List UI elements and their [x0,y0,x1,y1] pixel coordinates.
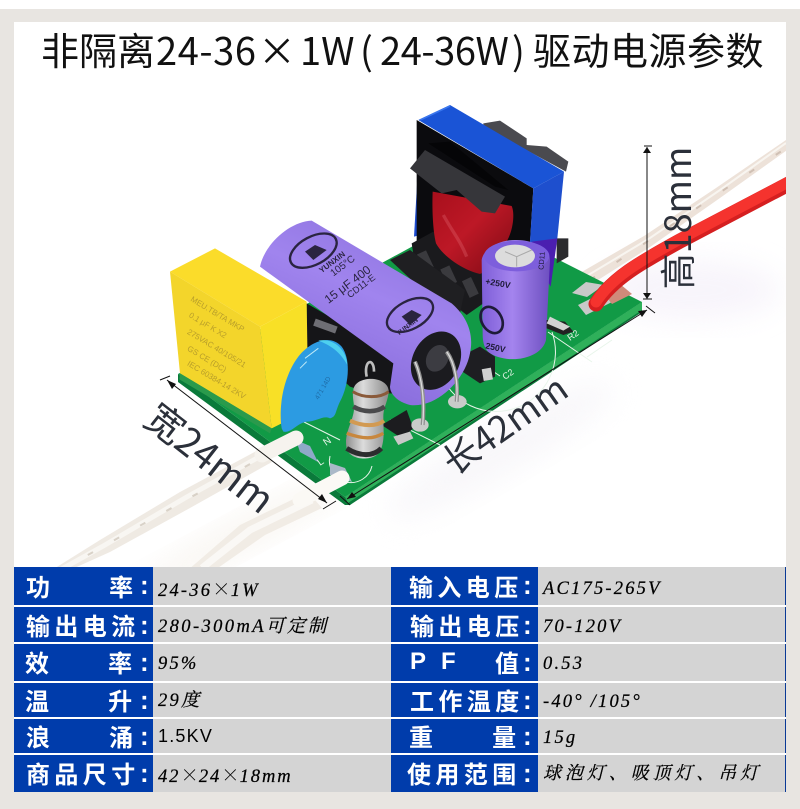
title: 驱动电源参数 [533,21,764,76]
row: power and input voltage: 输入电压 [409,568,523,603]
row: surge and weight: 1.5KV [158,726,213,746]
small electrolytic capacitor: CD11 [536,251,547,270]
row: power and input voltage: 24-36×1W [158,576,260,602]
row: surge and weight: 浪 涌 [26,718,137,753]
row: product size and application range: 球泡灯、吸顶灯、吊灯 [543,763,762,783]
row: output current and output voltage: : [523,610,532,640]
circuit board [178,246,642,505]
row: product size and application range: : [523,758,532,788]
row: product size and application range: 42×24×18mm [158,762,292,788]
red wire [596,176,800,304]
row: efficiency and power factor: : [523,647,532,677]
front white wires [52,448,322,570]
dimension line: width [160,376,336,509]
large electrolytic capacitor: 15 μF 400 [322,262,374,306]
yellow X2 capacitor: GS CE (DC) [186,344,228,375]
specification table [14,567,786,792]
row: temperature rise and working temperature: : [140,685,149,715]
row: output current and output voltage: : [140,610,149,640]
product photo illustration [57,105,786,567]
blue disc varistor: 471 14D [314,376,333,401]
row: output current and output voltage: 280-300mA可定制 [158,617,329,637]
row: power and input voltage: 功 率 [26,568,137,603]
striped power resistor [346,362,389,459]
row: power and input voltage: : [140,570,149,600]
yellow X2 capacitor: 275VAC 40/105/21 [186,327,248,370]
transformer [410,105,568,315]
title: 24-36 [156,21,257,76]
row: product size and application range [14,755,786,792]
large electrolytic capacitor: YUNXIN [395,317,420,338]
row: product size and application range: 使用范围 [407,755,521,790]
row: efficiency and power factor: 95% [158,654,199,674]
label: width 24mm: 宽24mm [135,388,288,524]
blue disc varistor [281,340,348,432]
row: surge and weight [14,718,786,753]
label: length 42mm: 长42mm [431,361,577,486]
row: product size and application range: 商品尺寸 [26,755,140,790]
row: temperature rise and working temperature: 温 升 [25,682,136,717]
row: temperature rise and working temperature: -40° /105° [543,692,642,712]
row: surge and weight: 重 量 [409,718,520,753]
large electrolytic capacitor: 105°C [329,254,357,279]
row: temperature rise and working temperature [14,682,786,717]
title: × [258,21,296,76]
dimension line: height [643,146,652,299]
row: efficiency and power factor: 效 率 [25,644,136,679]
row: power and input voltage: : [523,570,532,600]
row: output current and output voltage: 70-120V [543,617,622,637]
title: 1W [300,21,354,76]
white photo panel [14,22,786,567]
large electrolytic capacitor: CD11-E [345,272,377,300]
row: temperature rise and working temperature: 29度 [158,691,202,711]
row: output current and output voltage: 输出电压 [410,607,524,642]
large electrolytic capacitor [260,221,471,405]
row: surge and weight: 15g [543,728,577,748]
capacitor pins and black parts [382,352,467,445]
row: surge and weight: : [523,721,532,751]
row: efficiency and power factor: P F [410,648,460,675]
circuit board: L [315,456,327,468]
row: power and input voltage [14,567,786,605]
circuit board: R2 [565,328,581,343]
title: 非隔离 [41,21,155,76]
dimension line: length [340,306,655,505]
yellow X2 capacitor: MEU.TB/TA MKP [189,295,246,334]
row: efficiency and power factor: 值 [495,644,523,679]
row: efficiency and power factor: : [140,647,149,677]
title: ) [512,21,525,76]
small electrolytic capacitor: 250V [485,341,507,355]
small electrolytic capacitor [476,240,550,359]
yellow X2 capacitor [170,248,308,433]
row: output current and output voltage [14,607,786,642]
circuit board: C2 [500,367,516,382]
row: efficiency and power factor [14,644,786,681]
rear white wire [582,140,786,280]
row: temperature rise and working temperature: : [523,685,532,715]
row: temperature rise and working temperature: 工作温度 [410,682,524,717]
row: product size and application range: : [140,758,149,788]
row: surge and weight: : [140,721,149,751]
title: ( [360,21,373,76]
row: power and input voltage: AC175-265V [543,579,662,599]
large electrolytic capacitor: YUNXIN [317,249,347,275]
black IC under capacitor [460,317,573,383]
row: efficiency and power factor: 0.53 [543,654,584,674]
title [41,21,764,498]
wire ends on pads [262,438,342,500]
title: 24-36W [380,21,509,76]
yellow X2 capacitor: IEC 60384-14 2KV [186,359,248,401]
label: height 18mm: 高18mm [650,147,702,289]
small electrolytic capacitor: +250V [485,276,511,290]
row: output current and output voltage: 输出电流 [26,607,140,642]
yellow X2 capacitor: 0.1 μF K X2 [187,311,229,340]
circuit board: N [321,435,334,448]
